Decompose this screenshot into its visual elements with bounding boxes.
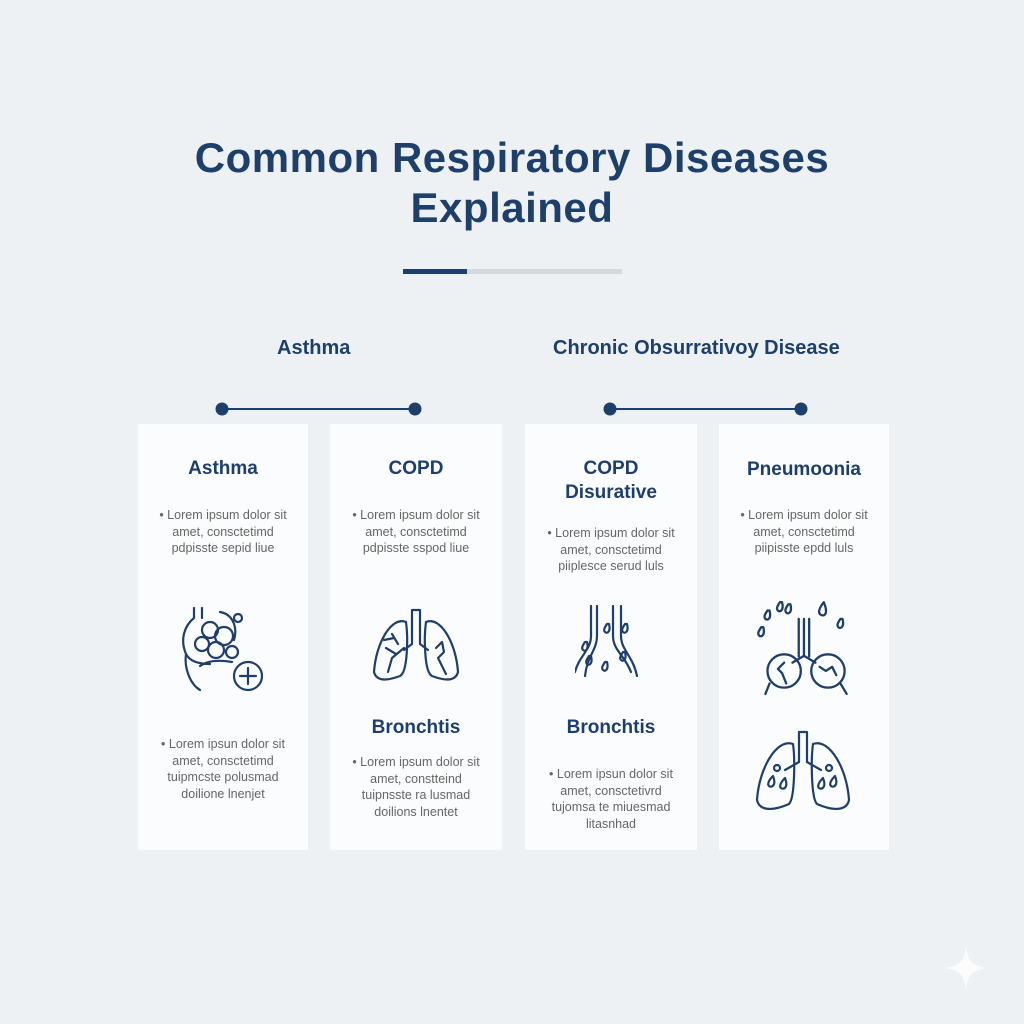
icon: alveoli [182, 606, 264, 692]
title [195, 134, 829, 231]
icon: bronchi [575, 604, 638, 678]
icon: pneumonia lungs [757, 601, 848, 696]
text: • Lorem ipsun dolor sit [549, 767, 673, 781]
text: amet, consctetimd [753, 524, 855, 538]
text: amet, consctetimd [560, 542, 662, 556]
text: tuipnsste ra lusmad [362, 788, 470, 802]
heading: Pneumoonia [747, 459, 861, 480]
title underline [403, 269, 622, 274]
text: • Lorem ipsum dolor sit [159, 508, 287, 522]
text: piipisste epdd luls [755, 541, 853, 555]
text [352, 508, 480, 555]
text: tujomsa te miuesmad [552, 800, 670, 814]
text: piiplesce serud luls [558, 559, 664, 573]
connector left [216, 402, 422, 416]
panel: COPD [330, 424, 502, 850]
text: • Lorem ipsum dolor sit [547, 526, 675, 540]
decorative sparkle [946, 948, 986, 988]
title: Common Respiratory Diseases [195, 134, 829, 181]
text [549, 767, 673, 830]
heading: Bronchtis [372, 717, 460, 738]
text: amet, consctetimd [172, 524, 274, 538]
text: doilions lnentet [374, 804, 458, 818]
text: amet, constteind [370, 772, 462, 786]
text [547, 526, 675, 573]
text: • Lorem ipsum dolor sit [740, 508, 868, 522]
panel: COPD Disurative [525, 424, 697, 850]
text: amet, consctetivrd [560, 784, 662, 798]
section heading: Chronic: Chronic Obsurrativoy Disease [553, 337, 840, 359]
text [740, 508, 868, 555]
icon: lungs with drops [756, 730, 850, 810]
heading: COPD [389, 458, 443, 479]
text [159, 508, 287, 555]
heading: Asthma [188, 458, 258, 479]
text [161, 737, 285, 800]
text: pdpisste sspod liue [363, 541, 469, 555]
section heading: Asthma: Asthma [277, 337, 350, 359]
text: amet, consctetimd [365, 524, 467, 538]
heading: Disurative [565, 482, 657, 503]
text: pdpisste sepid liue [172, 541, 274, 555]
heading [565, 458, 657, 503]
heading: Bronchtis [567, 717, 655, 738]
heading: COPD [584, 458, 638, 479]
title: Explained [411, 184, 613, 231]
text: • Lorem ipsum dolor sit [352, 508, 480, 522]
text: • Lorem ipsum dolor sit [352, 755, 480, 769]
text: litasnhad [586, 816, 636, 830]
panel: asthma [138, 424, 308, 850]
text: amet, consctetimd [172, 754, 274, 768]
icon: lungs [372, 608, 460, 681]
text: doilione lnenjet [181, 786, 265, 800]
text [352, 755, 480, 818]
panel: Pneumonia [719, 424, 889, 850]
connector right [604, 402, 808, 416]
text: • Lorem ipsun dolor sit [161, 737, 285, 751]
text: tuipmcste polusmad [167, 770, 279, 784]
